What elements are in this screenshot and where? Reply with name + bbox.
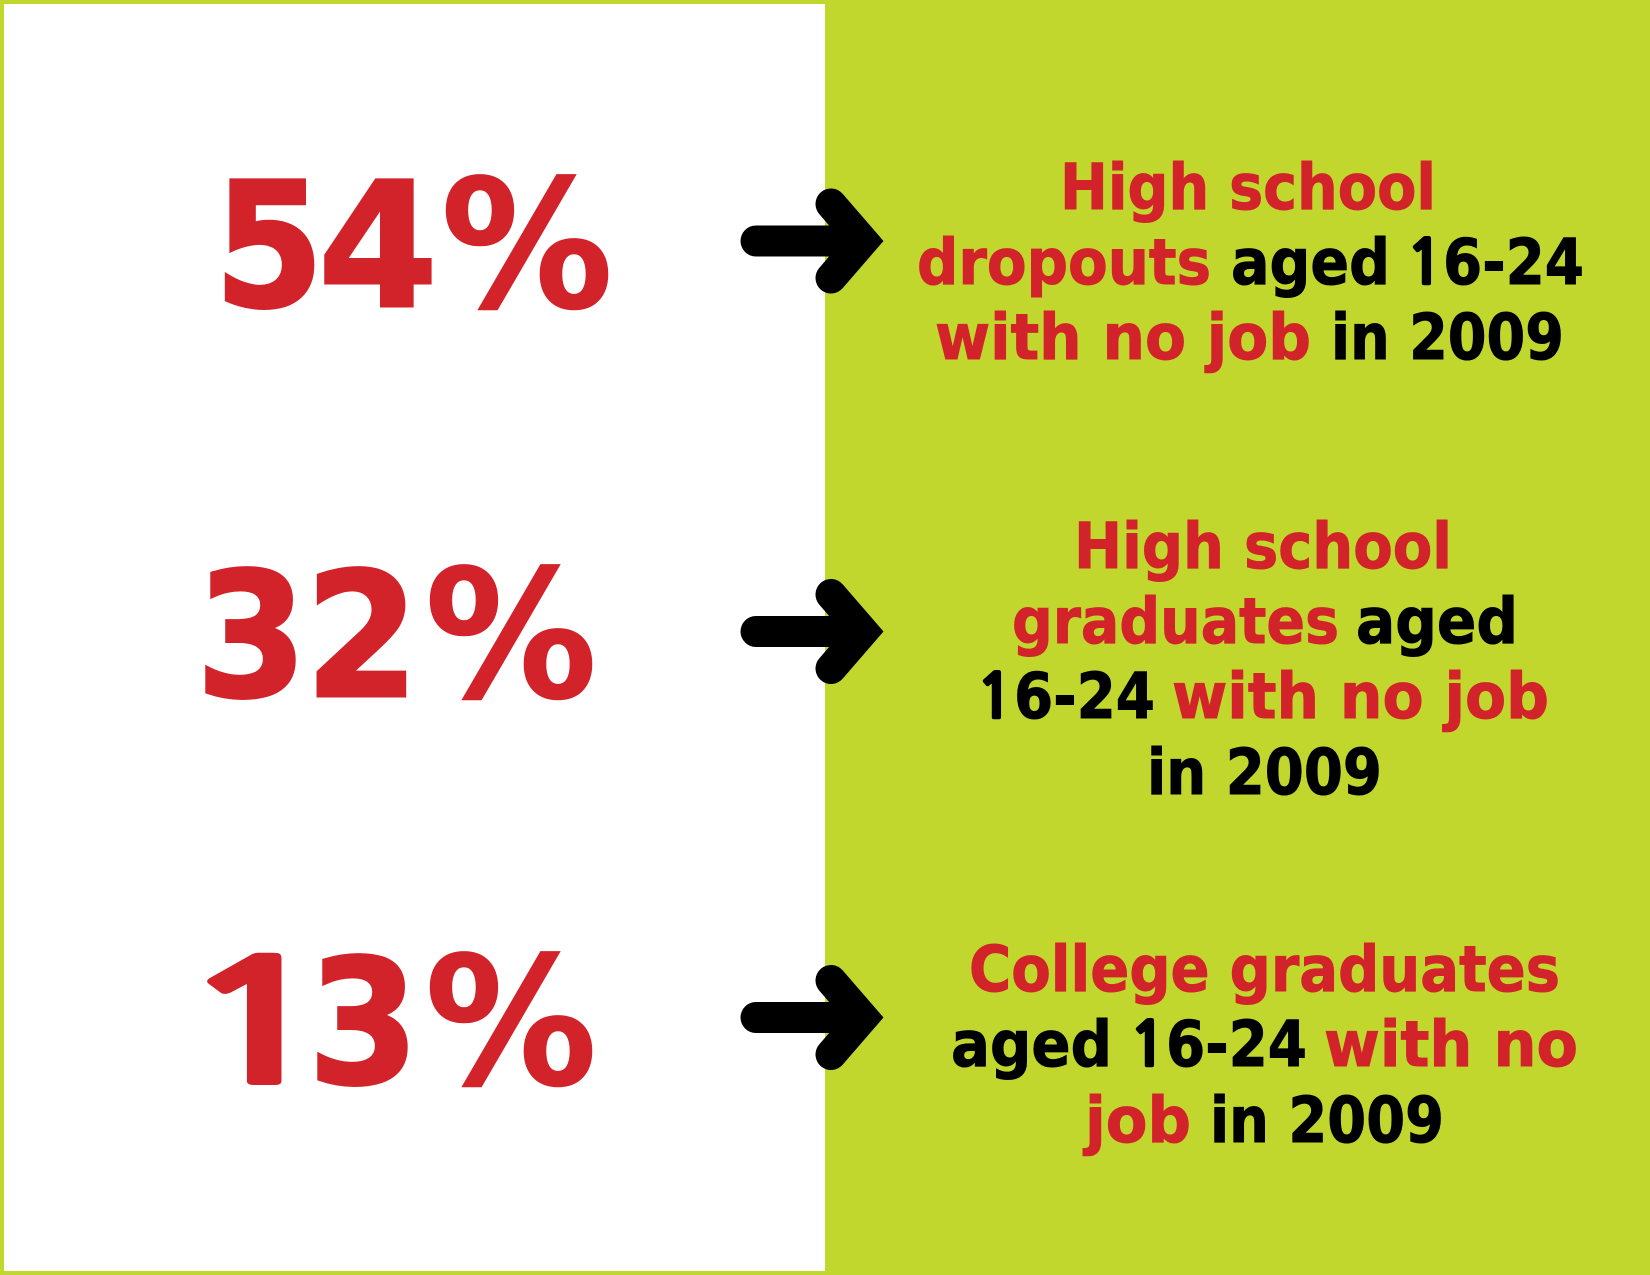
text block: college graduates: with no xyxy=(1324,1008,1578,1081)
text block: high school dropouts xyxy=(917,151,1584,374)
text block: college graduates xyxy=(951,933,1578,1157)
text block: high school dropouts: in 2009 xyxy=(1331,301,1564,374)
text block: college graduates: 6-24 xyxy=(1166,1008,1307,1081)
statistic: 13% xyxy=(174,919,597,1126)
statistic: 13%: 3 xyxy=(308,922,419,1124)
text block: high school graduates: in 2009 xyxy=(1147,736,1382,809)
text block: college graduates: job xyxy=(1082,1084,1191,1157)
text block: college graduates: in 2009 xyxy=(1210,1084,1444,1157)
text block: college graduates: 1 xyxy=(1129,1016,1167,1076)
text block: high school dropouts: aged xyxy=(1231,226,1390,299)
statistic: 13%: 1 xyxy=(174,941,342,1109)
statistic: 54%: % xyxy=(441,142,613,349)
text block: high school graduates: with no job xyxy=(1172,660,1549,733)
statistic: 54%: 5 xyxy=(214,145,324,347)
text block: high school dropouts: with no job xyxy=(935,301,1311,374)
arrow: row 1 xyxy=(756,204,863,278)
text block: high school graduates: graduates xyxy=(1012,585,1339,658)
statistic: 32% xyxy=(196,532,597,739)
text block: high school graduates: 1 xyxy=(976,668,1014,728)
statistic: 13%: % xyxy=(425,919,597,1126)
text block: high school dropouts: 6-24 xyxy=(1443,226,1584,299)
statistic: 54%: 4 xyxy=(318,145,438,347)
statistic: 32%: % xyxy=(425,532,597,739)
statistic: 32%: 2 xyxy=(305,535,419,737)
text block: high school dropouts: 1 xyxy=(1406,234,1444,294)
text block: college graduates: College graduates xyxy=(969,933,1560,1006)
text block: high school graduates: High school xyxy=(1074,510,1452,583)
text block: high school graduates xyxy=(976,510,1549,809)
text block: high school graduates: aged xyxy=(1356,585,1518,658)
statistic: 32%: 3 xyxy=(196,535,307,737)
text block: high school dropouts: dropouts xyxy=(917,226,1211,299)
text block: high school graduates: 6-24 xyxy=(1014,660,1155,733)
text block: college graduates: aged xyxy=(951,1008,1112,1081)
statistic: 54% xyxy=(214,142,613,349)
arrow: row 2 xyxy=(756,594,863,668)
text block: high school dropouts: High school xyxy=(1060,151,1436,224)
arrow: row 3 xyxy=(756,980,863,1054)
